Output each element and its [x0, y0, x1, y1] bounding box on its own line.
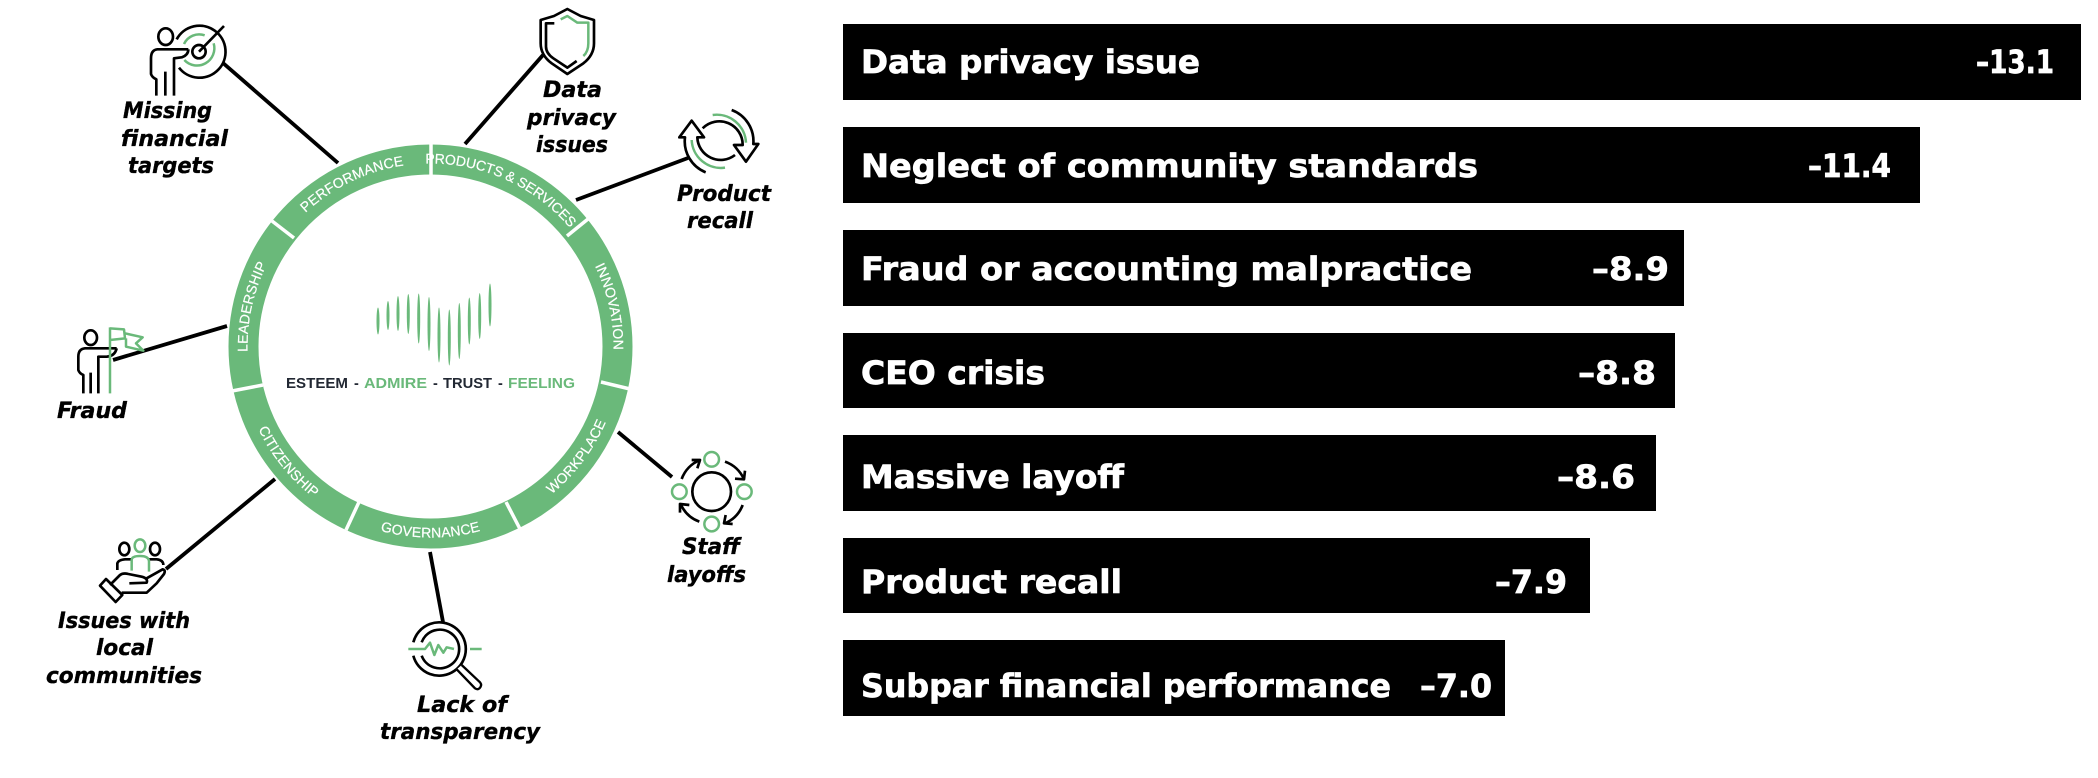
label: lack of transparency: Lack of — [417, 693, 509, 718]
label: issues with local communities — [46, 609, 202, 689]
label: missing financial targets — [121, 99, 228, 179]
bar: neglect of community standards — [843, 127, 1920, 203]
label: product recall — [677, 182, 772, 234]
label: data privacy issues: privacy — [526, 106, 618, 131]
label: product recall: recall — [687, 209, 753, 234]
label: product recall: Product — [677, 182, 772, 207]
bar: neglect of community standards: Neglect of community standards — [861, 147, 1478, 185]
label: issues with local communities: local — [96, 636, 153, 661]
bar: product recall: –7.9 — [1495, 563, 1567, 601]
center logo: tapered green bars — [376, 284, 492, 366]
bar: massive layoff: Massive layoff — [861, 458, 1125, 496]
ring label: governance: GOVERNANCE — [382, 522, 480, 538]
label: lack of transparency: transparency — [380, 720, 542, 745]
ring label: workplace: WORKPLACE — [545, 418, 606, 493]
bar: data privacy issue: Data privacy issue — [861, 43, 1200, 81]
label: data privacy issues — [526, 78, 618, 158]
ring label: leadership: LEADERSHIP — [238, 262, 264, 351]
connector lines from ring to icons — [113, 55, 688, 622]
bar: subpar financial performance: –7.0 — [1420, 667, 1492, 705]
label: staff layoffs: layoffs — [667, 563, 746, 588]
ring label: performance: PERFORMANCE — [300, 156, 404, 212]
bar: data privacy issue — [843, 24, 2081, 100]
bar: massive layoff: –8.6 — [1557, 458, 1635, 496]
center logo tagline: - — [354, 376, 359, 392]
ring label: products and services: PRODUCTS & SERVICES — [426, 154, 576, 226]
label: missing financial targets: targets — [128, 154, 214, 179]
ring label: innovation: INNOVATION — [595, 262, 624, 349]
center logo tagline — [286, 376, 575, 392]
center logo tagline: - — [433, 376, 438, 392]
bar: data privacy issue: –13.1 — [1976, 43, 2054, 81]
center logo tagline: ADMIRE — [364, 376, 427, 392]
icon: product recall cycle arrows — [679, 110, 758, 172]
label: data privacy issues: Data — [543, 78, 602, 103]
label: missing financial targets: financial — [121, 127, 228, 152]
label: lack of transparency — [380, 693, 542, 745]
ring label: citizenship: CITIZENSHIP — [260, 426, 318, 494]
icon: staff cycle — [672, 452, 752, 531]
label: staff layoffs — [667, 535, 746, 588]
bar: CEO crisis: CEO crisis — [861, 354, 1045, 392]
label: issues with local communities: Issues with — [58, 609, 190, 634]
label: fraud: Fraud — [57, 399, 127, 424]
bar: subpar financial performance: Subpar financial performance — [861, 667, 1391, 705]
label: data privacy issues: issues — [536, 133, 608, 158]
bar chart: reputation impact by crisis — [843, 24, 2081, 716]
icon: person with flag — [78, 327, 143, 393]
circular diagram: reputation dimensions ring — [228, 144, 632, 548]
center logo tagline: ESTEEM — [286, 376, 348, 392]
label: missing financial targets: Missing — [123, 99, 212, 124]
icon: hand holding people — [100, 539, 165, 602]
bar: fraud or accounting malpractice: Fraud or accounting malpractice — [861, 250, 1472, 288]
bar: CEO crisis — [843, 333, 1675, 408]
bar: neglect of community standards: –11.4 — [1808, 147, 1891, 185]
bar: fraud or accounting malpractice — [843, 230, 1684, 306]
bar: subpar financial performance — [843, 640, 1505, 716]
label: issues with local communities: communities — [46, 664, 202, 689]
center logo tagline: TRUST — [443, 376, 492, 392]
label: staff layoffs: Staff — [682, 535, 743, 560]
icon: person pointing at target — [151, 26, 226, 96]
bar: CEO crisis: –8.8 — [1578, 354, 1656, 392]
bar: fraud or accounting malpractice: –8.9 — [1592, 250, 1669, 288]
bar: product recall: Product recall — [861, 563, 1122, 601]
bar: product recall — [843, 538, 1590, 613]
icon: shield — [541, 9, 594, 74]
icon: magnifier over signal — [408, 622, 482, 689]
center logo tagline: FEELING — [508, 376, 575, 392]
center logo tagline: - — [498, 376, 503, 392]
bar: massive layoff — [843, 435, 1656, 511]
